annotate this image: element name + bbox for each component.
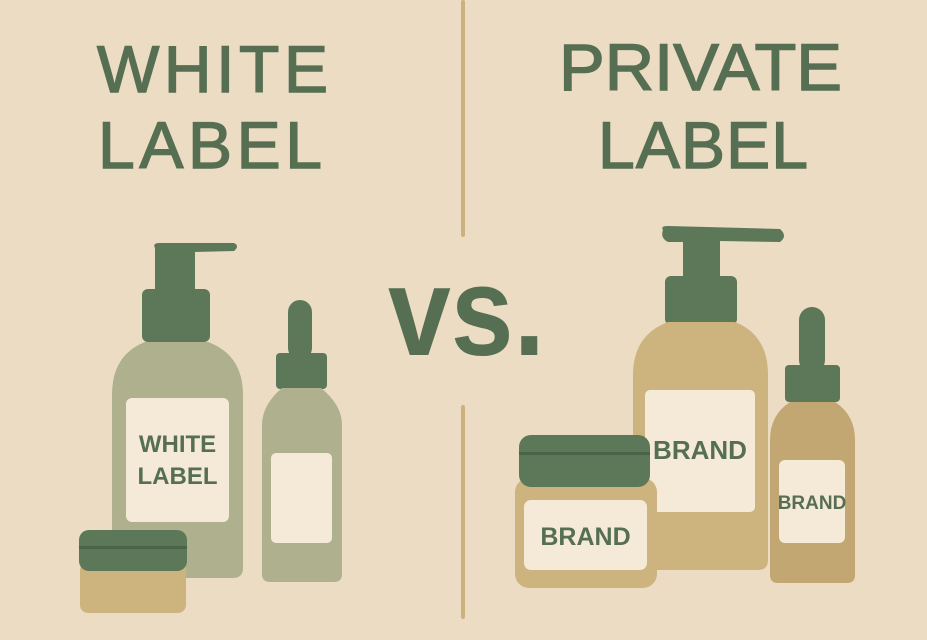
left pump bottle: WHITE: [139, 431, 216, 458]
right dropper bottle: BRAND: [778, 493, 846, 514]
title: white label: LABEL: [98, 108, 322, 182]
divider top: [461, 0, 465, 237]
left dropper bottle: [262, 300, 342, 582]
divider bottom: [461, 405, 465, 619]
title: private label: [559, 30, 842, 182]
title: private label: PRIVATE: [559, 30, 842, 104]
left jar: [79, 530, 187, 613]
right dropper bottle: [770, 307, 855, 583]
title: white label: [97, 32, 328, 182]
title: white label: WHITE: [97, 32, 328, 106]
left pump bottle: [112, 243, 243, 578]
vs text: vs.: [388, 241, 545, 382]
title: private label: LABEL: [598, 108, 808, 182]
left pump bottle: LABEL: [138, 463, 218, 490]
right pump bottle: BRAND: [653, 435, 747, 465]
right pump bottle: [633, 226, 784, 570]
right jar: [515, 435, 657, 588]
right jar: BRAND: [540, 523, 631, 551]
